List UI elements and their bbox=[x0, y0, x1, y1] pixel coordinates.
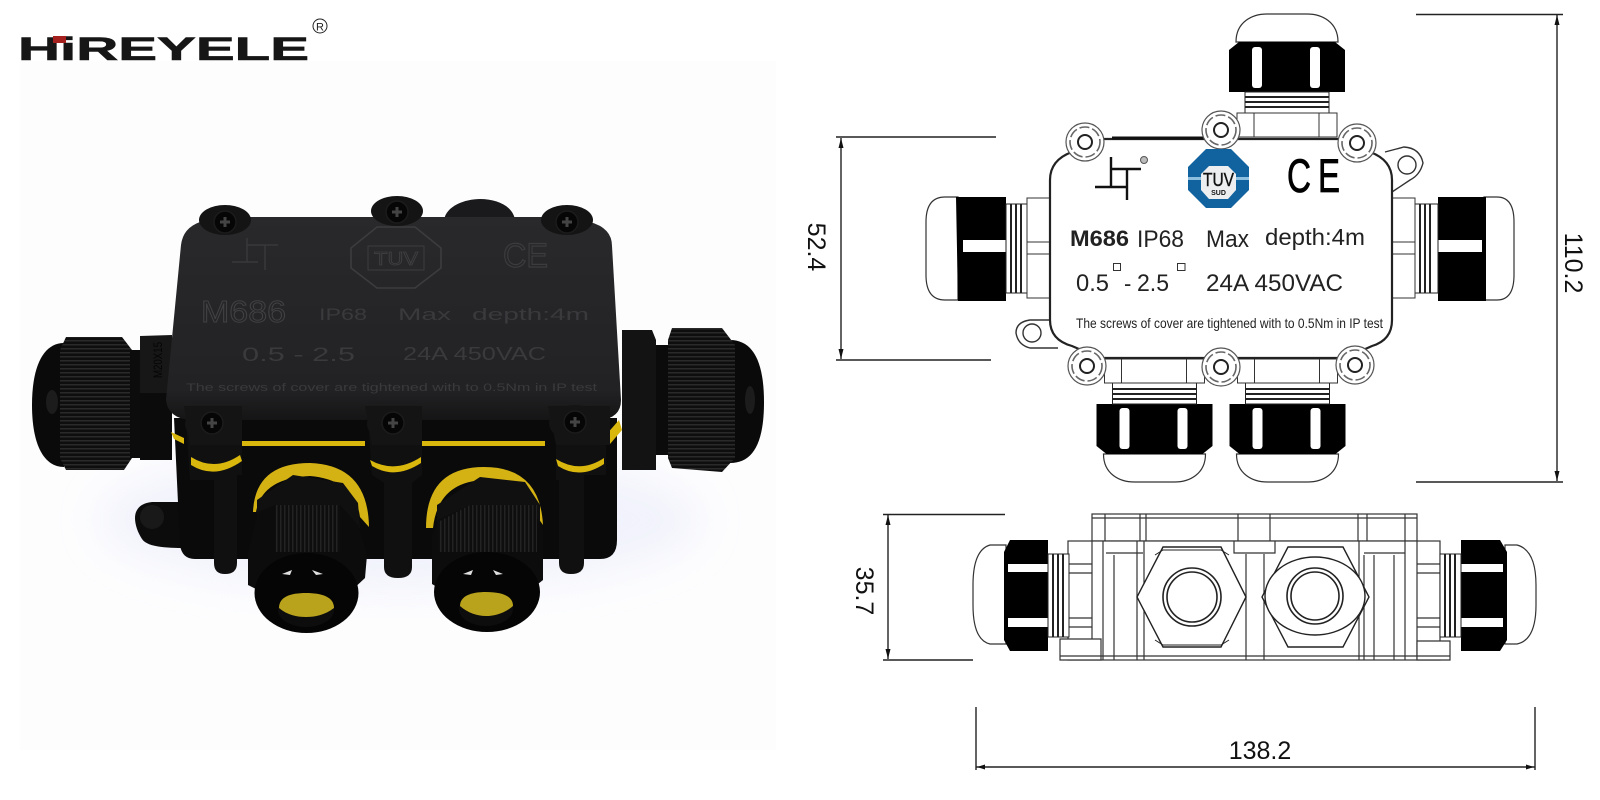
label: model and rating: Max bbox=[1206, 226, 1249, 253]
mounting tabs bbox=[1016, 147, 1423, 348]
dimension: width 52.4: 52.4 bbox=[802, 223, 830, 271]
label: model and rating: IP68 bbox=[1137, 226, 1184, 253]
embossed specification text: depth:4m bbox=[472, 305, 589, 324]
yellow seal bbox=[171, 420, 622, 473]
icon: CE mark: C bbox=[1287, 149, 1311, 202]
embossed specification text: Max bbox=[398, 305, 452, 324]
lower housing bbox=[174, 418, 617, 559]
label: cable range and electrical rating: 0.5 bbox=[1076, 270, 1109, 297]
support posts bbox=[186, 420, 606, 578]
front left gland bbox=[248, 463, 369, 633]
label: model and rating: M686 bbox=[1070, 226, 1129, 251]
diagram: top view of junction box bbox=[926, 14, 1514, 482]
logo: HIREYELE: R bbox=[316, 22, 324, 34]
dimension: height 110.2 bbox=[1416, 14, 1587, 482]
right side gland bbox=[1440, 540, 1536, 651]
logo: HIREYELE bbox=[18, 19, 327, 67]
dimension: depth 35.7: 35.7 bbox=[850, 567, 878, 615]
embossed CE mark: CE bbox=[503, 237, 548, 275]
embossed specification text: IP68 bbox=[319, 305, 367, 324]
label: cable range and electrical rating: - bbox=[1124, 271, 1131, 296]
panel: product photo bbox=[20, 61, 776, 750]
label: cable range and electrical rating bbox=[1076, 264, 1343, 297]
embossed TUV badge: TUV bbox=[374, 249, 418, 269]
right hex nut port bbox=[1262, 547, 1369, 647]
left side gland bbox=[973, 540, 1069, 651]
embossed specification text: 0.5 - 2.5 bbox=[242, 345, 355, 366]
embossed specification text: M686 bbox=[201, 294, 286, 329]
dimension: length 138.2 bbox=[976, 707, 1535, 770]
icon: maker mark bbox=[1095, 156, 1148, 200]
embossed logo mark bbox=[232, 238, 278, 270]
label: cable range and electrical rating: 2.5 bbox=[1137, 270, 1169, 297]
mounting tab bbox=[135, 502, 190, 548]
rear gland behind the lid bbox=[444, 199, 515, 220]
logo: HIREYELE: HiREYELE bbox=[18, 31, 309, 67]
left cable gland bbox=[32, 335, 172, 470]
screws bbox=[201, 201, 586, 434]
left cable gland bbox=[926, 197, 1050, 301]
lid with embossed markings bbox=[166, 196, 621, 445]
body outline bbox=[1060, 541, 1450, 660]
embossed specification text: The screws of cover are tightened with to 0.5Nm in IP test bbox=[186, 382, 597, 394]
icon: CE mark bbox=[1287, 149, 1340, 202]
lid outline bbox=[1092, 514, 1417, 541]
label: screw torque note: The screws of cover are tightened with to 0.5Nm in IP test bbox=[1076, 315, 1383, 331]
box body bbox=[1050, 139, 1392, 358]
label: model and rating: depth:4m bbox=[1265, 224, 1365, 250]
top and bottom cable glands bbox=[1096, 14, 1346, 482]
dimension: width 52.4 bbox=[802, 137, 996, 360]
right cable gland bbox=[622, 328, 764, 472]
corner screw ears bbox=[1066, 111, 1376, 386]
left hex nut port bbox=[1137, 547, 1246, 647]
dimension: depth 35.7 bbox=[850, 514, 1005, 660]
diagram: side view of junction box bbox=[973, 514, 1536, 660]
icon: TUV SUD badge bbox=[1188, 149, 1249, 208]
right cable gland bbox=[1392, 197, 1514, 301]
icon: TUV SUD badge: TUV bbox=[1203, 170, 1234, 190]
lid screw ears bbox=[184, 196, 610, 445]
front right gland bbox=[426, 467, 543, 632]
label: model and rating bbox=[1070, 224, 1365, 253]
label: cable range and electrical rating: 24A 450VAC bbox=[1206, 270, 1343, 297]
embossed specification text bbox=[186, 294, 597, 394]
dimension: length 138.2: 138.2 bbox=[1229, 737, 1291, 765]
icon: CE mark: E bbox=[1318, 149, 1340, 202]
embossed TUV badge bbox=[351, 227, 441, 288]
embossed specification text: 24A 450VAC bbox=[403, 344, 546, 364]
dimension: height 110.2: 110.2 bbox=[1559, 233, 1587, 293]
icon: TUV SUD badge: SUD bbox=[1211, 190, 1226, 197]
left cable gland: M20X15 bbox=[151, 342, 165, 378]
